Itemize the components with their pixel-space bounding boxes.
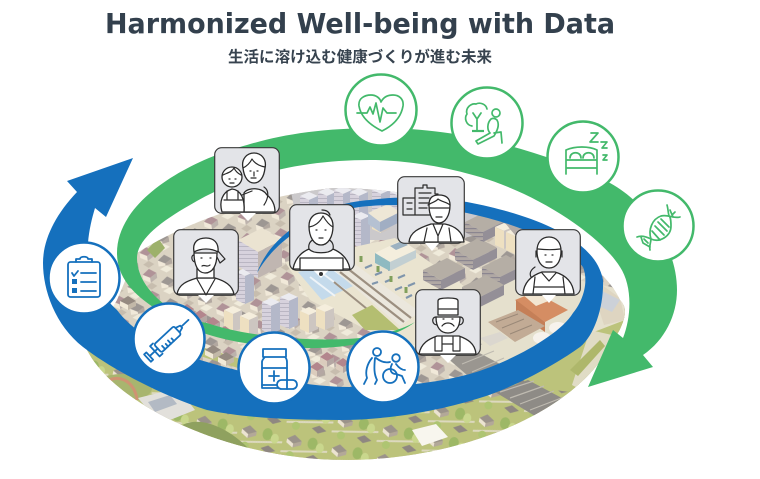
card: person with laptop xyxy=(290,205,354,278)
icon: caregiver with wheelchair xyxy=(348,332,418,402)
lower left towers and blocks xyxy=(120,228,350,377)
card: elderly man in cap xyxy=(416,290,480,363)
mall building xyxy=(375,240,416,271)
icon: syringe xyxy=(134,304,204,374)
blue arrow ring xyxy=(43,158,603,420)
title: Harmonized Well-being with Data xyxy=(105,8,615,40)
card: worker with bandana xyxy=(174,230,238,303)
railway tracks xyxy=(450,344,564,416)
grey mid-rise blocks xyxy=(423,216,521,306)
icon: person exercising by tree xyxy=(452,88,522,158)
icon: DNA helix xyxy=(622,190,694,262)
icon: bed with zzz xyxy=(548,122,618,192)
green arrow ring xyxy=(117,128,677,387)
right side plain ground xyxy=(480,280,625,364)
parking and station xyxy=(285,238,470,345)
illustrated city map xyxy=(87,188,625,460)
top high-rise district xyxy=(292,188,488,246)
subtitle: 生活に溶け込む健康づくりが進む未来 xyxy=(228,47,492,66)
card: doctor and hospital xyxy=(398,177,464,251)
card: woman in apron xyxy=(516,230,580,303)
icon: heart with pulse xyxy=(346,74,416,146)
icon: medicine bottle and pill xyxy=(238,332,310,404)
orange buildings and tanks xyxy=(481,296,568,346)
green suburbs xyxy=(87,305,625,460)
icon: checklist clipboard xyxy=(48,242,120,314)
card: parent and child xyxy=(215,148,279,221)
